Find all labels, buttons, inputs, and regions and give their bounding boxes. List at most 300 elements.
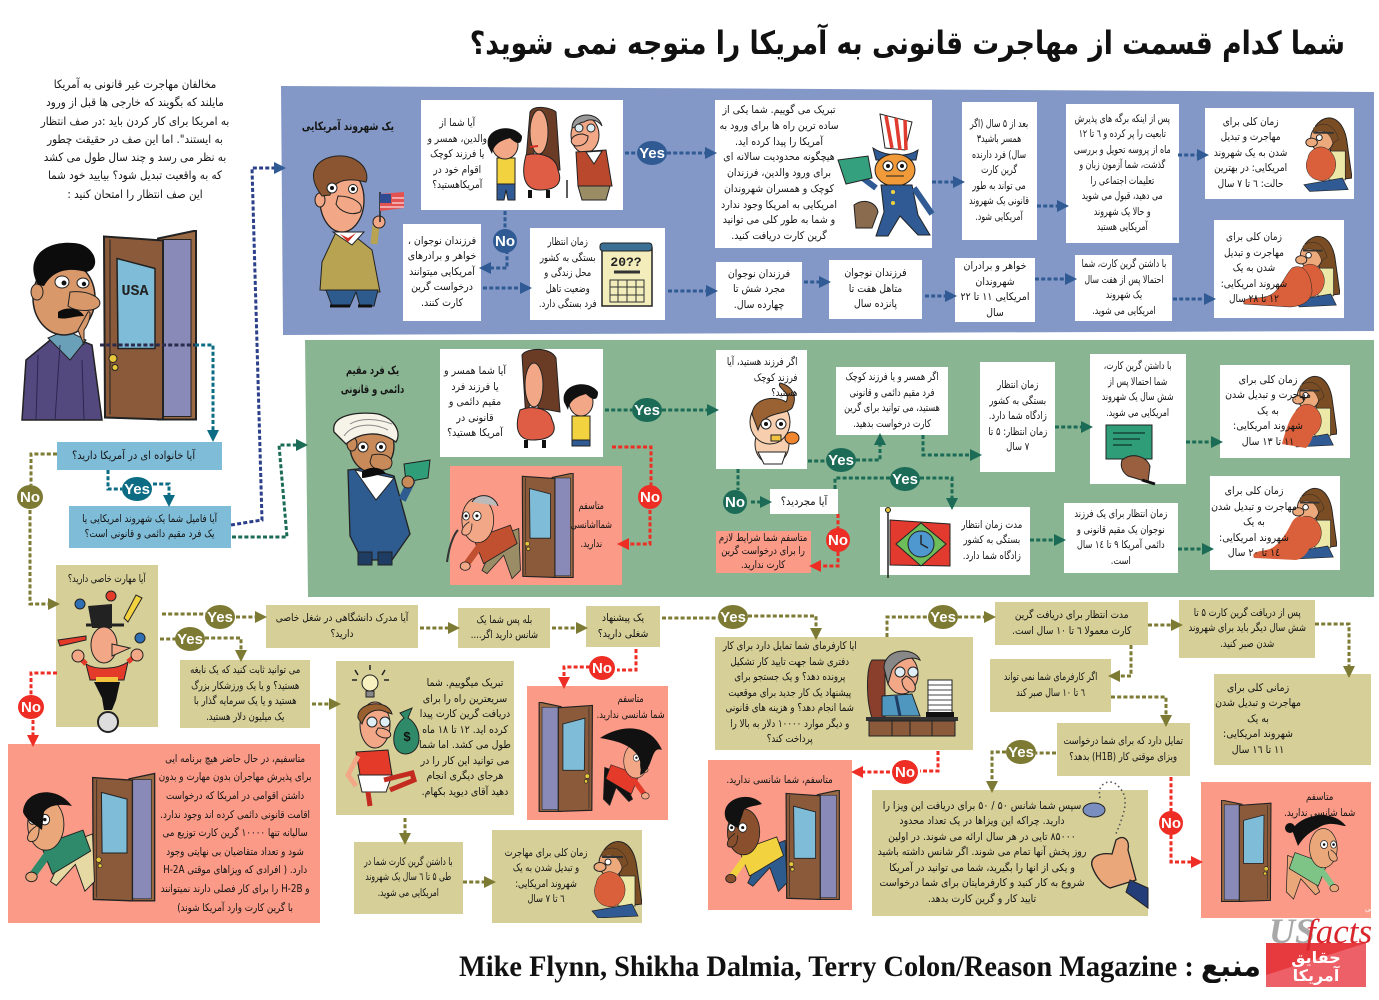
box: citizenship test: تابعیت را پر کرده و ٦ تا ١٢ [1079, 128, 1166, 140]
arrow: door to family box [100, 344, 195, 346]
arrow: no to ponytail woman [1171, 835, 1194, 862]
box: congratulations fast way: دهید آقای دیوید بکهام. [422, 786, 508, 798]
heading: permanent resident [341, 363, 404, 396]
box: total 11 to 13: زمان کلی برای [1239, 374, 1297, 386]
arrow: family to no [31, 454, 57, 485]
box: after five years: بعد از ۵ سال (اگر [970, 118, 1029, 130]
box: not eligible: را برای درخواست گرین [722, 545, 805, 557]
box: teen children siblings: کارت کنند. [421, 297, 463, 309]
box: waiting depends on country: وضعیت تاهل [546, 283, 590, 295]
character: waiter olive [592, 842, 642, 918]
arrow: after to total [1315, 624, 1349, 669]
arrow: no to skill [30, 510, 51, 604]
box: citizenship test: آمریکایی هستید [1097, 221, 1148, 233]
badge: yes genius: Yes [177, 631, 203, 648]
heading: permanent resident: یک فرد مقیم [346, 363, 399, 377]
badge: no single: No [828, 532, 848, 549]
character: waiter long beard [1244, 236, 1340, 307]
box: no skilled program big apology: و H-2B را برای کار فصلی دارند نمیتوانند [161, 883, 309, 895]
box: total 6 to 7 [492, 830, 642, 923]
box: no chance woman: شما شانسی ندارید. [597, 708, 665, 720]
badge: no employer: No [895, 764, 915, 781]
box: congratulations fast way [336, 661, 514, 815]
box: total 6 to 7: شهروند امریکایی: [515, 878, 577, 890]
arrow: test to total [1178, 154, 1200, 156]
box: siblings: امریکایی ١١ تا ٢٢ [961, 291, 1029, 303]
box: special skill juggler: آیا مهارت خاصی دارید؟ [68, 573, 146, 585]
logo: USfacts: حقایق [1291, 948, 1341, 967]
box: citizenship test: و حالا یک شهروند [1094, 206, 1151, 218]
box: no skilled program big apology: برای پذیرش مهاجران بدون مهارت و بدون [159, 771, 311, 783]
arrow: wait to six years [1055, 426, 1084, 428]
arrow: siblings to seven years [1035, 278, 1068, 280]
box: employer willing: شما انجام دهد؟ و هزینه های قانونی [726, 702, 854, 714]
intro text: که به واقعیت تبدیل شود؟ بیایید خود شما [48, 168, 222, 182]
badge: no visa [1159, 811, 1183, 835]
badge: yes employer [928, 605, 958, 629]
box: employer cannot wait: اگر کارفرمای شما نمی تواند [1004, 671, 1097, 683]
arrow: single to yes [835, 478, 890, 489]
box: not eligible: کارت ندارید. [741, 559, 786, 571]
box: teen wait 9 to 14: زمان انتظار برای یک فرزند [1075, 508, 1167, 520]
box: lottery 50 50: ٨۵٠٠٠ تایی در هر سال ارائه می شوند. در اولین [888, 831, 1076, 843]
box: married teens: فرزندان نوجوان [844, 267, 907, 279]
box: are you single [770, 489, 838, 514]
arrow: yes to flag [920, 478, 952, 501]
box: congratulations fast way: تبریک میگوییم. شما [427, 677, 503, 689]
box: flag wait: زادگاه شما دارد. [963, 550, 1021, 562]
character: executive at desk [866, 651, 958, 736]
box: job offer [586, 606, 660, 647]
arrow: visa to yes [1036, 752, 1056, 754]
box: five or six years after: پس از دریافت گرین کارت ۵ تا [1193, 607, 1300, 619]
box: congratulations family: امریکایی به امریکا وجود ندارد [721, 199, 837, 211]
box: congratulations family [715, 100, 932, 248]
box: university degree: آیا مدرک دانشگاهی در شغل خاصی [276, 612, 408, 624]
badge: no employer [892, 760, 918, 784]
intro text: به نظر می رسد و چند سال طول می کشد [44, 150, 226, 164]
box: no chance dark man [708, 760, 852, 910]
arrow: no to teens [488, 250, 507, 268]
character: Uncle Sam [838, 114, 932, 236]
box: siblings: خواهر و برادران [964, 260, 1026, 272]
character: mother and kid [517, 349, 598, 448]
character: waiter green bottom [1253, 488, 1337, 560]
box: temporary work visa [1057, 723, 1190, 776]
badge: yes family [122, 477, 152, 501]
box: total time 12 to 28: زمان کلی برای [1226, 231, 1282, 243]
box: flag wait [880, 507, 1030, 575]
box: relatives question: آمریکاهستید؟ [432, 179, 482, 191]
box: total time best case [1205, 108, 1354, 199]
box: no skilled program big apology: دارد. ( افرادی که ویزاهای موقتی H-2A [163, 864, 307, 876]
logo: USfacts [1266, 904, 1379, 987]
box: total time best case: زمان کلی برای [1223, 116, 1279, 128]
box: total 11 to 16: به یک [1247, 713, 1269, 725]
arrow: cannot wait to visa [1111, 697, 1166, 718]
box: after five years: همسر باشید۳ [977, 133, 1022, 145]
box: spouse may apply: هستید، می توانید برای گرین [844, 402, 940, 414]
icon: calendar [600, 243, 652, 306]
arrow: skill to no [31, 673, 57, 695]
icon: door USA [104, 230, 196, 420]
character: kid, mother, father [488, 107, 612, 200]
title: شما کدام قسمت از مهاجرت قانونی به آمریکا را متوجه نمی شوید؟ [470, 24, 1345, 62]
icon: door USA: USA [121, 283, 149, 300]
character: waiter short beard [1304, 118, 1352, 191]
box: congratulations family: هیچگونه محدودیت سالانه ای [723, 151, 835, 163]
badge: yes single [890, 467, 920, 491]
badge: no skill: No [21, 699, 41, 716]
box: total 14 to 20: ١٤ تا ٢٠ سال [1228, 547, 1280, 559]
box: spouse or child of resident [440, 349, 603, 457]
box: spouse or child of resident: آمریکا هستید؟ [447, 427, 503, 439]
box: employer willing: و دیگر موارد ١٠٠٠٠ دلار به بالا را [730, 718, 850, 730]
arrow: yes to child [662, 408, 710, 412]
box: total 11 to 13: شهروند امریکایی: [1233, 420, 1303, 432]
box: no skilled program big apology: اقامت قانونی دائمی کرده اند وجود ندارد. [160, 809, 310, 821]
badge: no visa: No [1161, 815, 1181, 832]
box: total time 12 to 28 [1214, 220, 1344, 318]
arrow: single to no [836, 514, 840, 530]
arrow: no to big apology [32, 720, 34, 738]
box: flag wait: بستگی به کشور [964, 534, 1020, 546]
arrow: yes to congratulations [667, 152, 708, 154]
box: employer willing: دفتری شما جهت تایید کار تشکیل [731, 656, 849, 668]
box: congratulations family: کوچک و همسران شهروندان [724, 183, 834, 195]
box: total 14 to 20: مهاجرت و تبدیل شدن [1211, 501, 1297, 513]
box: relatives question [421, 100, 623, 210]
badge: no child [723, 490, 747, 514]
badge: no resident spouse [638, 485, 662, 509]
box: wait by country 5 to 7: بستگی به کشور [989, 395, 1046, 407]
box: family in America question: آیا خانواده ای در آمریکا دارید؟ [72, 449, 195, 462]
icon: calendar: 20?? [610, 255, 642, 270]
box: not eligible: متاسفم شما شرایط لازم [719, 532, 808, 544]
box: relatives question: والدین، همسر و [427, 133, 487, 145]
box: spouse may apply: فرد مقیم دائمی و قانونی [850, 386, 934, 398]
box: single teens: مجرد شش تا [733, 283, 785, 295]
box: six years citizen: شما احتمالا پس از [1108, 376, 1168, 388]
intro text: به ایستند". اما این صف در حقیقت چطور [47, 132, 223, 146]
badge: yes degree: Yes [207, 609, 233, 626]
intro text: این صف انتظار را امتحان کنید : [67, 187, 203, 201]
box: wait by country 5 to 7: ۷ سال [1006, 441, 1029, 453]
box: spouse or child of resident: مقیم دائمی و [449, 396, 501, 408]
badge: no skill [18, 695, 44, 719]
box: wait by country 5 to 7 [980, 362, 1055, 472]
intro text [40, 77, 229, 201]
icon: door woman [539, 702, 592, 811]
box: university degree [266, 605, 418, 648]
icon: door old man [522, 473, 573, 577]
box: citizenship test: می دهید، قبول می شوید [1082, 190, 1163, 202]
box: employer willing: ایا کارفرمای شما تمایل دارد برای کار [723, 640, 857, 652]
box: total 11 to 16 [1214, 674, 1371, 765]
box: temporary work visa: ویزای موقتی کار (H1B) بدهد؟ [1070, 750, 1177, 762]
box: job offer: یک پیشنهاد [602, 612, 644, 624]
arrow: wait to cannot wait [1117, 645, 1131, 676]
box: total time best case: حالت: ٦ تا ٧ سال [1218, 178, 1284, 190]
box: wait by country 5 to 7: زادگاه شما دارد. [988, 410, 1047, 422]
box: no chance ponytail woman: متاسفم [1306, 791, 1334, 803]
badge: yes family: Yes [124, 481, 150, 498]
box: siblings: سال [986, 306, 1004, 318]
heading: permanent resident: دائمی و قانونی [341, 382, 404, 396]
arrow: skill to yes [162, 612, 206, 616]
arrow: to American citizen [231, 168, 277, 525]
icon: money bag: $ [403, 729, 411, 744]
box: no chance ponytail woman: شما شانسی ندارید. [1284, 806, 1356, 818]
box: six years citizen: با داشتن گرین کارت، [1104, 360, 1172, 372]
badge: no offer [589, 656, 615, 680]
box: total 11 to 16: زمانی کلی برای [1227, 682, 1289, 694]
badge: no family: No [20, 489, 40, 506]
box: with green card seven years: یک شهروند [1105, 289, 1142, 301]
box: single teens [716, 262, 802, 318]
box: wait by country 5 to 7: زمان انتظار [997, 379, 1038, 391]
box: congratulations fast way: هرجای دیگری انجام [426, 770, 504, 782]
box: wait 6 to 10: مدت انتظار برای دریافت گرین [1015, 609, 1128, 621]
box: teen wait 9 to 14: است. [1111, 554, 1131, 566]
box: total 11 to 16: شهروند امریکایی: [1223, 728, 1293, 740]
box: lottery 50 50: روز پخش آنها تمام می شوند. اگر شانس داشته باشید [878, 846, 1086, 858]
source line: Mike Flynn, Shikha Dalmia, Terry Colon/Reason Magazine : منبع [459, 950, 1261, 983]
box: after five years: آمریکایی شود. [976, 211, 1023, 223]
box: congratulations fast way: دریافت گرین کارت پیدا [420, 708, 510, 720]
box: total 14 to 20: شهروند امریکایی: [1219, 532, 1289, 544]
icon: door big apology [93, 774, 155, 901]
box: total 11 to 13 [1220, 365, 1350, 458]
box: no chance woman: متاسفم [618, 693, 644, 705]
box: genius or athlete: یک میلیون دلار هستید. [206, 710, 284, 722]
box: citizen in 5 to 6: با داشتن گرین کارت شما در [364, 856, 453, 868]
box: waiting depends on country: بستگی به کشور [540, 252, 596, 264]
badge: yes child: Yes [828, 452, 854, 469]
box: after five years: می تواند به طور [973, 180, 1026, 192]
character: baby [750, 383, 799, 464]
icon: flag with clock [886, 508, 950, 578]
logo: USfacts: US [1269, 911, 1315, 951]
box: total 14 to 20: به یک [1243, 516, 1265, 528]
box: teen children siblings [403, 224, 481, 321]
arrow: teen wait to total [1178, 548, 1205, 550]
box: siblings: شهروندان [975, 276, 1015, 288]
arrow: resident spouse to yes [605, 408, 632, 412]
box: employer cannot wait: ٦ تا ١٠ سال صبر کند [1016, 686, 1085, 698]
arrow: relatives to no [504, 211, 506, 230]
box: lottery 50 50 [872, 790, 1148, 916]
box: citizenship test: گذشت، شما آزمون زبان و [1080, 159, 1165, 171]
box: five or six years after: شش سال دیگر باید برای شهروند [1188, 622, 1306, 634]
panel: permanent resident [305, 340, 1374, 597]
intro text: به امریکا برای کار کردن باید :در صف انتظار [41, 114, 229, 128]
box: no chance dark man: متاسفم، شما شانسی ندارید. [727, 774, 833, 786]
box: are you single: آیا مجردید؟ [781, 495, 827, 508]
arrow: wait to single [668, 290, 709, 292]
arrow: citizen to total [463, 880, 487, 884]
box: congratulations fast way: کرده اید. ١٢ تا ١٨ ماه [422, 724, 508, 736]
character: American citizen [313, 156, 404, 306]
box: no chance old man: شمااشانسی [570, 519, 612, 531]
arrow: married to siblings [925, 294, 948, 298]
icon: light bulb [352, 665, 389, 697]
badge: no offer: No [592, 660, 612, 677]
arrow: no to old man [626, 510, 650, 544]
arrow: genius to congratulations [312, 702, 332, 706]
box: five or six years after: شدن صبر کنید. [1220, 638, 1274, 650]
box: total 6 to 7: و تبدیل شدن به یک [513, 862, 579, 874]
box: teen children siblings: خواهر و برادرهای [408, 250, 476, 262]
character: man with green sweater [23, 792, 94, 891]
box: lottery 50 50: دارید. چراکه این ویزاها در یک تعداد محدود [899, 815, 1065, 827]
box: you have a chance if [458, 608, 550, 648]
box: teen wait 9 to 14: نوجوان یک مقیم قانونی و [1077, 524, 1165, 536]
box: congratulations fast way: طول می کشد. اما شما [419, 739, 511, 751]
box: relatives question: یا فرزند کوچک [430, 148, 484, 160]
box: no skilled program big apology: سالیانه تنها ١٠٠٠٠ گرین کارت توزیع می [162, 827, 308, 839]
character: juggler [58, 591, 145, 732]
box: no chance old man: متاسفم [578, 500, 604, 512]
box: citizen in 5 to 6: امریکایی می شوید. [378, 887, 439, 899]
box: no chance woman [527, 686, 668, 820]
box: relatives question: اقوام خود در [433, 164, 481, 176]
box: teen wait 9 to 14: دائمی آمریکا ۹ تا ١٤ سال [1077, 539, 1165, 551]
character: woman with black hair [600, 728, 662, 805]
badge: yes employer: Yes [930, 609, 956, 626]
box: university degree: دارید؟ [330, 628, 354, 640]
box: employer willing: پرونده دهد؟ و یک جستجو برای [734, 671, 846, 683]
box: spouse may apply: کارت درخواست بدهید. [853, 418, 931, 430]
box: you have a chance if: بله پس شما یک [476, 614, 532, 626]
arrow: offer to no [617, 649, 636, 670]
box: spouse or child of resident: آیا شما همسر و [444, 365, 506, 377]
box: total time 12 to 28: شهروند امریکایی: [1221, 278, 1287, 290]
box: spouse may apply [836, 367, 948, 435]
box: congratulations family: ساده ترین راه ها برای ورود به [719, 120, 839, 132]
box: total time best case: شدن به یک شهروند [1214, 147, 1288, 159]
box: citizen in 5 to 6: طی ۵ تا ٦ سال یک شهروند [366, 871, 451, 883]
box: relative citizen or resident: یک فرد مقیم دائمی و قانونی است؟ [85, 528, 215, 540]
arrow: relatives to yes [625, 152, 638, 154]
box: total 11 to 13: به یک [1257, 405, 1279, 417]
character: waiter green top [1282, 376, 1337, 448]
badge: yes offer [718, 605, 748, 629]
box: employer cannot wait [990, 659, 1111, 712]
box: six years citizen: شش سال یک شهروند [1102, 391, 1174, 403]
box: lottery 50 50: شروع به کار کنید و کارفرمایتان برای شما درخواست [880, 877, 1084, 889]
box: citizenship test: ماه از پروسه تحویل و بررسی [1074, 144, 1171, 156]
box: no skilled program big apology: شود و تعداد متقاضیان بی نهایتی وجود [166, 846, 304, 858]
box: citizenship test: تعلیمات اجتماعی را [1091, 174, 1154, 186]
box: with green card seven years: احتمالا پس از هفت سال [1084, 274, 1163, 286]
box: no skilled program big apology: متاسفیم، در حال حاضر هیچ برنامه ایی [165, 753, 305, 765]
arrow: yes to relative [153, 484, 169, 498]
arrow: employer to no [920, 751, 938, 771]
box: spouse may apply: اگر همسر و یا فرزند کوچک [845, 371, 939, 383]
badge: yes degree [205, 605, 235, 629]
box: no skilled program big apology [8, 744, 320, 923]
arrow: no to dark man [860, 770, 890, 774]
badge: yes relatives [637, 141, 667, 165]
arrow: yes to degree [236, 616, 258, 618]
box: total 6 to 7: ٦ تا ٧ سال [527, 893, 565, 905]
badge: no resident spouse: No [640, 489, 660, 506]
box: are you a small child: فرزند کوچک [753, 372, 797, 384]
box: employer willing [715, 637, 973, 750]
arrow: child to yes [808, 460, 826, 462]
box: wait by country 5 to 7: زمان انتظار: ۵ تا [988, 426, 1047, 438]
box: congratulations family: گرین کارت دریافت کنید. [731, 230, 827, 242]
box: spouse or child of resident: یا فرزند فرد [451, 381, 499, 393]
box: total time best case: مهاجرت و تبدیل [1221, 131, 1281, 143]
box: total 11 to 16: مهاجرت و تبدیل شدن [1215, 697, 1301, 709]
panel: American citizen [281, 86, 1374, 335]
icon: flipped coin [1083, 782, 1125, 836]
box: are you a small child [716, 350, 807, 469]
badge: no family [17, 485, 43, 509]
box: five or six years after [1179, 600, 1315, 658]
box: waiting depends on country: فرد بستگی دارد. [539, 298, 597, 310]
character: ponytail woman [1285, 815, 1346, 899]
box: married teens: متاهل هفت تا [849, 283, 902, 295]
box: after five years [962, 102, 1037, 240]
box: congratulations family: آمریکا را پیدا کرده اید. [735, 136, 823, 148]
badge: yes child [826, 448, 856, 472]
box: genius or athlete [180, 660, 310, 728]
box: congratulations family: تبریک می گوییم. شما یکی از [722, 104, 836, 116]
box: married teens [829, 260, 922, 319]
box: total 6 to 7: زمان کلی برای مهاجرت [505, 846, 587, 858]
box: citizenship test: پس از اینکه برگه های پذیرش [1075, 112, 1170, 124]
arrow: yes to employer [748, 616, 816, 631]
arrow: family to yes [108, 470, 122, 489]
logo: USfacts: آمریکا [1293, 965, 1340, 985]
box: after five years: قانونی یک شهروند [970, 195, 1029, 207]
box: relative citizen or resident: آیا فامیل شما یک شهروند امریکایی یا [82, 512, 218, 524]
arrow: yes to wait [958, 616, 987, 618]
arrow: flag to teen wait [1030, 538, 1057, 542]
box: special skill juggler [56, 565, 158, 727]
character: soccer player [348, 702, 414, 806]
arrow: no to single [751, 500, 763, 504]
box: total 14 to 20 [1210, 476, 1340, 570]
box: total time 12 to 28: شدن به یک [1233, 262, 1275, 274]
box: no chance old man: ندارید. [580, 538, 602, 550]
arrow: resident spouse to no [612, 447, 651, 485]
icon: money bag [394, 708, 419, 754]
character: thinking man [22, 243, 102, 420]
box: lottery 50 50: و یکی از انها را بگیرید، شما می توانید در آمریکا [889, 862, 1075, 874]
badge: yes genius [175, 627, 205, 651]
box: teen children siblings: آمریکایی میتوانند [409, 266, 475, 278]
box: waiting depends on country: محل زندگی و [545, 267, 591, 279]
badge: no relatives: No [495, 233, 515, 250]
badge: no relatives [493, 229, 517, 253]
box: total 11 to 13: ١١ تا ١٣ سال [1242, 436, 1294, 448]
arrow: no to woman [564, 667, 590, 680]
box: family in America question [57, 442, 222, 470]
arrow: visa to no [1170, 777, 1172, 812]
box: teen wait 9 to 14 [1064, 503, 1178, 573]
box: teen children siblings: فرزندان نوجوان ، [408, 235, 476, 247]
box: congratulations family: و شما به طور کلی می توانید [723, 214, 835, 226]
box: genius or athlete: هستید و یا یک سرمایه گذار با [194, 695, 296, 707]
box: siblings [955, 258, 1035, 322]
arrow: yes to spouse may apply [856, 442, 880, 460]
character: dark man crawling [725, 797, 787, 891]
box: genius or athlete: هستید؟ و یا یک ورزشکار بزرگ [191, 680, 299, 692]
